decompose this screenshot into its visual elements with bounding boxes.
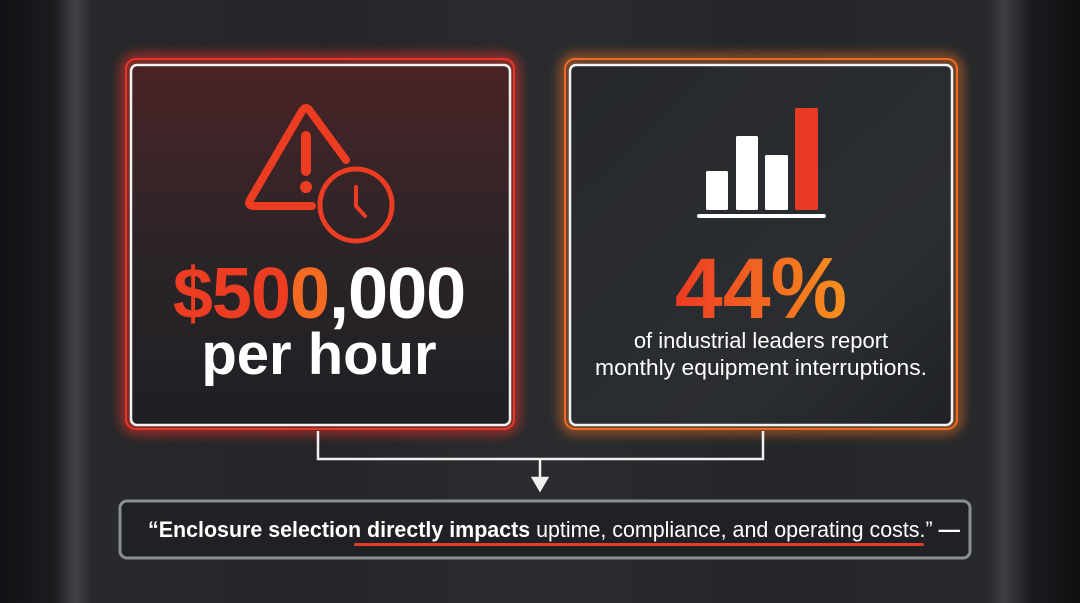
description: of industrial leaders report [634, 328, 888, 353]
stat: 44%: 44% [675, 241, 847, 337]
stat: $500,000: $500,000 [173, 254, 465, 334]
quote box [120, 501, 970, 558]
label: per hour: per hour [201, 322, 437, 387]
panel: cost per hour [126, 59, 514, 429]
icon: warning triangle with clock [249, 108, 392, 241]
quote box: “Enclosure selection directly impacts uptime, compliance, and operating costs.” — [148, 517, 960, 542]
underline [354, 543, 924, 546]
panel: interruptions: monthly equipment interruptions. [595, 355, 927, 380]
panel: interruptions [565, 59, 957, 429]
connector arrow [318, 431, 763, 490]
icon: bar chart [697, 108, 826, 218]
